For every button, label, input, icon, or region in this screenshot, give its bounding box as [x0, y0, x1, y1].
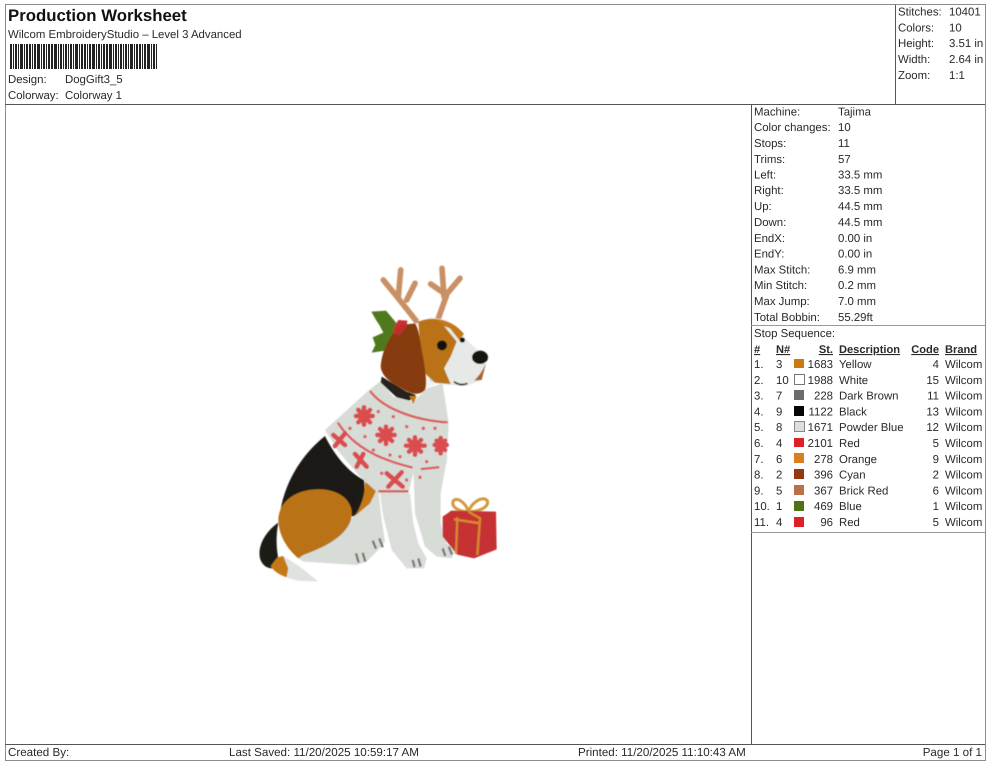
row 9: 367: [814, 486, 833, 498]
stats box: Stitches:: [898, 6, 942, 18]
row 10: Wilcom: [945, 501, 982, 513]
title: Production Worksheet: [8, 6, 187, 25]
machine settings list: 33.5 mm: [838, 170, 882, 182]
row 1: Wilcom: [945, 359, 982, 371]
row 11: [754, 517, 982, 529]
row 5: [754, 422, 982, 434]
footer: Last Saved: 11/20/2025 10:59:17 AM: [229, 746, 419, 759]
row 1: [754, 359, 982, 371]
black saddle: [280, 436, 365, 517]
head: [418, 318, 488, 386]
paw toes: [413, 547, 452, 567]
row 8: 8.: [754, 470, 764, 482]
machine settings list: 33.5 mm: [838, 185, 882, 197]
machine settings list: 55.29ft: [838, 312, 874, 324]
machine settings list: EndY:: [754, 248, 784, 260]
nose: [472, 351, 488, 364]
table heading: Stop Sequence:: [754, 328, 835, 340]
row 9: 6: [933, 486, 939, 498]
machine settings list: 44.5 mm: [838, 201, 882, 213]
hind paw toes: [356, 538, 383, 563]
row 9: Brick Red: [839, 486, 888, 498]
row 1: 4: [933, 359, 939, 371]
row 3: 7: [776, 391, 782, 403]
row 3: 228: [814, 391, 833, 403]
machine settings list: Color changes:: [754, 122, 831, 134]
embroidered beagle illustration: [259, 268, 497, 582]
row 2: 10: [776, 375, 789, 387]
row 10: 1: [776, 501, 782, 513]
machine settings list: Max Jump:: [754, 296, 810, 308]
row 5: 1671: [808, 422, 833, 434]
machine settings list: Left:: [754, 170, 776, 182]
stats box: Height:: [898, 38, 934, 50]
row 5: Powder Blue: [839, 422, 904, 434]
gift ribbon bands: [454, 512, 480, 555]
stats box: 10401: [949, 6, 981, 18]
row 9: [754, 485, 982, 498]
eye: [437, 340, 447, 350]
colorway: Colorway 1: [65, 90, 122, 102]
row 4: 4.: [754, 406, 764, 418]
software line: Wilcom EmbroideryStudio – Level 3 Advanced: [8, 29, 242, 41]
row 10: 1: [933, 501, 939, 513]
row 3: [754, 390, 982, 403]
stats box: [898, 6, 983, 82]
machine settings list: Max Stitch:: [754, 264, 810, 276]
table column headers: Code: [911, 344, 939, 356]
ear: [381, 323, 426, 394]
row 9: 9.: [754, 486, 764, 498]
row 4: 1122: [808, 406, 833, 418]
row 5: 12: [926, 422, 939, 434]
row 2: Wilcom: [945, 375, 982, 387]
row 7: Wilcom: [945, 454, 982, 466]
machine settings list: Trims:: [754, 154, 785, 166]
row 6: 2101: [808, 438, 833, 450]
row 9: 5: [776, 486, 782, 498]
sweater dots: [348, 410, 437, 482]
machine settings list: Right:: [754, 185, 784, 197]
row 8: 2: [776, 470, 782, 482]
row 8: 396: [814, 470, 833, 482]
machine settings list: Machine:: [754, 106, 800, 118]
sweater stripes: [338, 392, 447, 491]
row 6: Wilcom: [945, 438, 982, 450]
row 4: 13: [926, 406, 939, 418]
machine settings list: Down:: [754, 217, 786, 229]
gift ribbon bow: [453, 499, 488, 512]
machine settings list: 0.2 mm: [838, 280, 876, 292]
table column headers: #: [754, 344, 760, 356]
antlers: [383, 268, 460, 321]
row 11: 11.: [754, 517, 769, 529]
row 10: 469: [814, 501, 833, 513]
footer: Printed: 11/20/2025 11:10:43 AM: [578, 746, 746, 759]
red bow: [393, 320, 407, 335]
table column headers: St.: [819, 344, 833, 356]
stitch texture: [278, 317, 457, 558]
row 7: 7.: [754, 454, 764, 466]
row 2: White: [839, 375, 868, 387]
row 7: Orange: [839, 454, 877, 466]
row 2: 2.: [754, 375, 764, 387]
stats box: 10: [949, 22, 962, 34]
machine settings list: Up:: [754, 201, 772, 213]
front leg, rear: [413, 457, 455, 558]
front leg, main: [380, 493, 427, 568]
footer: Created By:: [8, 746, 69, 759]
row 11: 96: [820, 517, 833, 529]
gift box body: [443, 511, 497, 558]
row 1: 1.: [754, 359, 764, 371]
stats box: 2.64 in: [949, 54, 983, 66]
row 5: Wilcom: [945, 422, 982, 434]
sweater snowflakes: [333, 407, 447, 487]
row 8: Wilcom: [945, 470, 982, 482]
machine settings list: 6.9 mm: [838, 264, 876, 276]
row 4: Black: [839, 406, 867, 418]
row 6: Red: [839, 438, 860, 450]
row 11: 4: [776, 517, 782, 529]
stats box: 3.51 in: [949, 38, 983, 50]
row 11: 5: [933, 517, 939, 529]
table column headers: Brand: [945, 344, 977, 356]
machine settings list: Total Bobbin:: [754, 312, 820, 324]
row 1: 3: [776, 359, 782, 371]
row 3: 3.: [754, 391, 764, 403]
table column headers: Description: [839, 344, 900, 356]
header: title and design info: [8, 6, 242, 102]
row 10: Blue: [839, 501, 862, 513]
far eye: [460, 337, 465, 343]
design name: DogGift3_5: [65, 74, 123, 86]
row 11: Wilcom: [945, 517, 982, 529]
row 6: 6.: [754, 438, 764, 450]
machine settings list: 0.00 in: [838, 248, 872, 260]
holly leaves: [371, 311, 397, 353]
collar: [381, 377, 416, 401]
table column headers: [754, 344, 977, 356]
machine settings list: 11: [838, 138, 850, 150]
row 8: [754, 469, 982, 482]
row 4: 9: [776, 406, 782, 418]
row 7: 9: [933, 454, 939, 466]
barcode: [10, 44, 158, 69]
row 10: 10.: [754, 501, 770, 513]
stats box: Zoom:: [898, 70, 930, 82]
row 7: 278: [814, 454, 833, 466]
row 7: 6: [776, 454, 782, 466]
machine settings list: 57: [838, 154, 851, 166]
machine settings list: 10: [838, 122, 851, 134]
mouth: [454, 382, 467, 384]
sweater: [325, 381, 449, 493]
machine settings list: 44.5 mm: [838, 217, 882, 229]
row 9: Wilcom: [945, 486, 982, 498]
row 8: 2: [933, 470, 939, 482]
machine settings list: 7.0 mm: [838, 296, 876, 308]
gift box: [443, 499, 497, 558]
machine settings list: 0.00 in: [838, 233, 872, 245]
row 3: Dark Brown: [839, 391, 899, 403]
row 1: 1683: [808, 359, 833, 371]
row 10: [754, 501, 982, 513]
orange side patch: [355, 482, 377, 516]
machine settings list: [754, 106, 882, 324]
design name: Design:: [8, 74, 47, 86]
stats box: 1:1: [949, 70, 965, 82]
row 2: 15: [926, 375, 939, 387]
muzzle shade: [474, 363, 486, 381]
row 5: 8: [776, 422, 782, 434]
row 8: Cyan: [839, 470, 866, 482]
footer: [8, 746, 982, 759]
machine settings list: Stops:: [754, 138, 786, 150]
row 6: 5: [933, 438, 939, 450]
stats box: Width:: [898, 54, 930, 66]
row 6: 4: [776, 438, 782, 450]
orange haunch: [278, 489, 352, 558]
row 6: [754, 438, 982, 450]
row 2: [754, 374, 982, 387]
machine settings list: EndX:: [754, 233, 785, 245]
table column headers: N#: [776, 344, 790, 356]
stop sequence table: [754, 328, 982, 529]
stats box: Colors:: [898, 22, 934, 34]
row 2: 1988: [808, 375, 833, 387]
row 3: 11: [927, 391, 939, 403]
row 1: Yellow: [839, 359, 872, 371]
row 3: Wilcom: [945, 391, 982, 403]
row 5: 5.: [754, 422, 764, 434]
machine settings list: Tajima: [838, 106, 872, 118]
colorway: Colorway:: [8, 90, 59, 102]
row 11: Red: [839, 517, 860, 529]
tail: [259, 523, 318, 582]
machine settings list: Min Stitch:: [754, 280, 807, 292]
row 4: [754, 406, 982, 418]
row 4: Wilcom: [945, 406, 982, 418]
hind leg and belly: [298, 490, 385, 565]
footer: Page 1 of 1: [923, 746, 982, 759]
collar tag: [409, 396, 417, 404]
row 7: [754, 453, 982, 466]
